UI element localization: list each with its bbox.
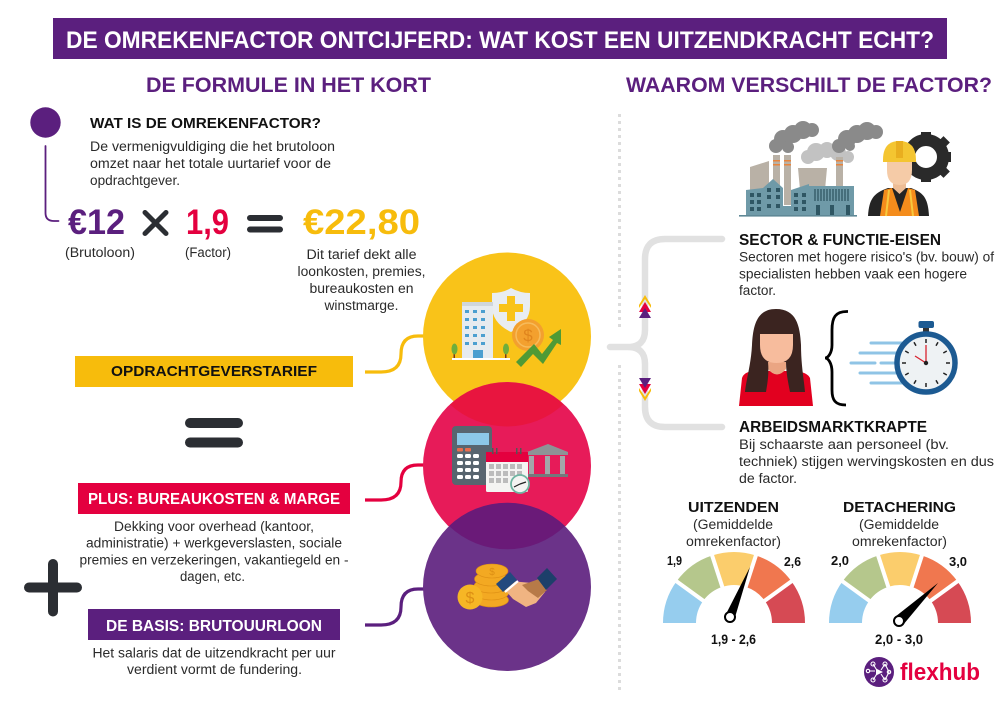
gauge labels: 2,0 xyxy=(831,553,849,568)
icon: coins and handshake: $ xyxy=(466,590,475,607)
gauge heading xyxy=(843,500,956,549)
text block: wat is de omrekenfactor: omzet naar het totale uurtarief voor de xyxy=(90,156,331,171)
multiply sign xyxy=(145,212,166,234)
text block: bureaukosten uitleg: premies en verzekeringen, vakantiegeld en - xyxy=(80,552,348,568)
icon: coins and handshake xyxy=(458,564,557,610)
text block: arbeidsmarktkrapte: Bij schaarste aan personeel (bv. xyxy=(739,437,949,452)
title banner xyxy=(53,18,947,59)
heading: de formule in het kort: DE FORMULE IN HET KORT xyxy=(146,73,431,97)
plus icon xyxy=(29,564,77,612)
text block: sector en functie-eisen: specialisten hebben vaak een hogere xyxy=(739,266,967,282)
gauge labels xyxy=(831,553,967,647)
bar: de basis brutouurloon: DE BASIS: BRUTOUURLOON xyxy=(106,618,322,635)
icon: worker with gear xyxy=(868,132,951,216)
gauge labels xyxy=(667,553,801,647)
connectors to circles xyxy=(365,336,424,625)
brutoloon caption: (Brutoloon) xyxy=(65,245,135,260)
timeline dot and connector xyxy=(30,107,61,221)
text block: bureaukosten uitleg xyxy=(80,519,348,584)
text block: tarief uitleg: Dit tarief dekt alle xyxy=(306,247,416,262)
logo: flexhub xyxy=(864,657,980,687)
text block: tarief uitleg: loonkosten, premies, xyxy=(298,264,426,279)
gauge labels: 3,0 xyxy=(949,554,967,569)
gauge: uitzenden xyxy=(663,500,805,647)
factor caption: (Factor) xyxy=(185,245,231,260)
text block: arbeidsmarktkrapte xyxy=(739,419,994,486)
formula xyxy=(65,203,420,260)
brutoloon value: €12 xyxy=(68,203,125,242)
logo: flexhub: flexhub xyxy=(900,659,980,686)
dotted divider xyxy=(618,114,621,690)
gauge: detachering xyxy=(829,500,971,647)
bar: de basis brutouurloon xyxy=(88,609,340,640)
text block: arbeidsmarktkrapte: ARBEIDSMARKTKRAPTE xyxy=(739,419,927,436)
gauge heading: UITZENDEN xyxy=(688,500,779,516)
text block: sector en functie-eisen: SECTOR & FUNCTIE-EISEN xyxy=(739,232,941,249)
factor value: 1,9 xyxy=(186,203,229,242)
gauge heading: (Gemiddelde xyxy=(859,517,939,532)
gauge dial xyxy=(663,552,805,623)
equals sign xyxy=(250,218,280,230)
icon: calculator, calendar and bank xyxy=(452,426,568,493)
text block: bureaukosten uitleg: Dekking voor overhead (kantoor, xyxy=(114,519,314,534)
text block: sector en functie-eisen xyxy=(739,232,994,298)
bar: bureaukosten en marge xyxy=(78,483,350,514)
equals icon xyxy=(190,423,238,442)
text block: basis uitleg xyxy=(92,646,336,677)
text block: wat is de omrekenfactor: De vermenigvuldiging die het brutoloon xyxy=(90,139,335,154)
bar: opdrachtgeverstarief: OPDRACHTGEVERSTARIEF xyxy=(111,363,317,380)
gauge dial xyxy=(829,552,971,623)
heading: waarom verschilt de factor: WAAROM VERSCHILT DE FACTOR? xyxy=(626,73,992,97)
text block: sector en functie-eisen: factor. xyxy=(739,283,776,298)
text block: arbeidsmarktkrapte: techniek) stijgen wervingskosten en dus xyxy=(739,454,994,469)
title banner: DE OMREKENFACTOR ONTCIJFERD: WAT KOST EEN UITZENDKRACHT ECHT? xyxy=(66,27,934,54)
text block: wat is de omrekenfactor: opdrachtgever. xyxy=(90,173,180,188)
icon: building, shield, coin and growth arrow xyxy=(452,288,561,367)
gauge heading: (Gemiddelde xyxy=(693,517,773,532)
text block: bureaukosten uitleg: administratie) + werkgeverslasten, sociale xyxy=(86,536,342,550)
text block: basis uitleg: verdient vormt de fundering. xyxy=(127,662,302,677)
gauge labels: 1,9 - 2,6 xyxy=(711,632,756,647)
total value: €22,80 xyxy=(303,203,420,242)
gauge needle xyxy=(725,567,750,622)
icon: building, shield, coin and growth arrow: $ xyxy=(523,326,533,345)
gauge heading: DETACHERING xyxy=(843,500,956,516)
gauge labels: 1,9 xyxy=(667,553,682,568)
gauge heading: omrekenfactor) xyxy=(852,534,947,549)
gauge labels: 2,6 xyxy=(784,554,801,569)
text block: wat is de omrekenfactor: WAT IS DE OMREKENFACTOR? xyxy=(90,116,321,132)
icon: curly brace xyxy=(825,311,848,405)
icon: woman portrait xyxy=(739,309,813,406)
text block: tarief uitleg: bureaukosten en xyxy=(310,281,414,296)
text block: wat is de omrekenfactor xyxy=(90,116,335,188)
text block: bureaukosten uitleg: dagen, etc. xyxy=(180,569,245,584)
bar: opdrachtgeverstarief xyxy=(75,356,353,387)
arrows down xyxy=(639,378,651,401)
gauge heading: omrekenfactor) xyxy=(686,534,781,549)
gauge heading xyxy=(686,500,781,549)
text block: basis uitleg: Het salaris dat de uitzendkracht per uur xyxy=(92,646,336,660)
arrows up xyxy=(639,295,651,318)
bracket connector xyxy=(610,239,722,427)
icon: stopwatch xyxy=(851,321,955,392)
icon: factory xyxy=(739,121,883,217)
gauge labels: 2,0 - 3,0 xyxy=(875,632,923,647)
icon: coins and handshake: $ xyxy=(489,567,495,578)
bar: bureaukosten en marge: PLUS: BUREAUKOSTEN & MARGE xyxy=(88,491,340,508)
text block: arbeidsmarktkrapte: de factor. xyxy=(739,471,797,486)
text block: tarief uitleg xyxy=(298,247,426,313)
text block: sector en functie-eisen: Sectoren met hogere risico's (bv. bouw) of xyxy=(739,250,994,264)
text block: tarief uitleg: winstmarge. xyxy=(323,298,398,313)
gauge needle xyxy=(894,583,938,626)
circles stack xyxy=(423,252,591,671)
